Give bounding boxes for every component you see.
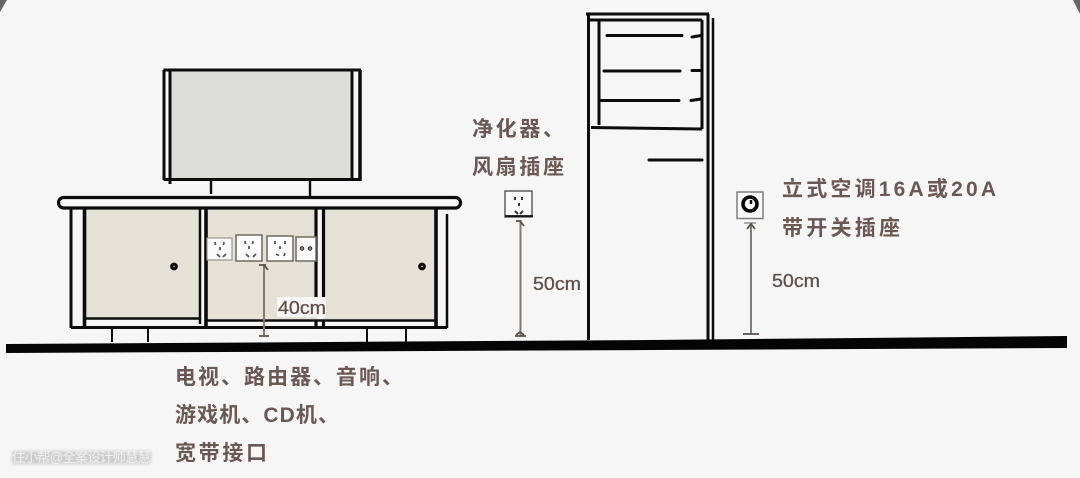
arrow: 40cm height (259, 265, 269, 336)
icon: purifier socket (505, 191, 533, 217)
arrow: AC 50cm height (743, 224, 759, 334)
arrow: purifier 50cm height (515, 220, 526, 336)
text: purifier and fan socket (472, 118, 564, 179)
text: TV wall devices: 游戏机、CD机、 (175, 404, 339, 427)
label: purifier 50cm: 50cm (533, 273, 581, 294)
text: AC socket note: 带开关插座 (782, 216, 900, 240)
text: TV wall devices (175, 365, 403, 465)
floor line (6, 336, 1067, 353)
watermark: 住小帮@全案设计师慧慧 (12, 449, 151, 465)
text: TV wall devices: 电视、路由器、音响、 (175, 365, 403, 389)
air conditioner (586, 14, 713, 340)
icon: AC switched socket (737, 192, 763, 223)
TV wall sockets (207, 235, 316, 261)
text: AC socket note (782, 177, 996, 240)
cabinet door knobs (172, 264, 424, 269)
TV cabinet (58, 198, 460, 342)
text: purifier and fan socket: 风扇插座 (472, 155, 564, 179)
text: AC socket note: 立式空调16A或20A (782, 177, 996, 201)
television (164, 70, 361, 197)
label: 40cm: 40cm (278, 297, 326, 318)
text: TV wall devices: 宽带接口 (175, 441, 267, 465)
text: purifier and fan socket: 净化器、 (472, 118, 564, 141)
label: AC 50cm: 50cm (772, 270, 820, 291)
